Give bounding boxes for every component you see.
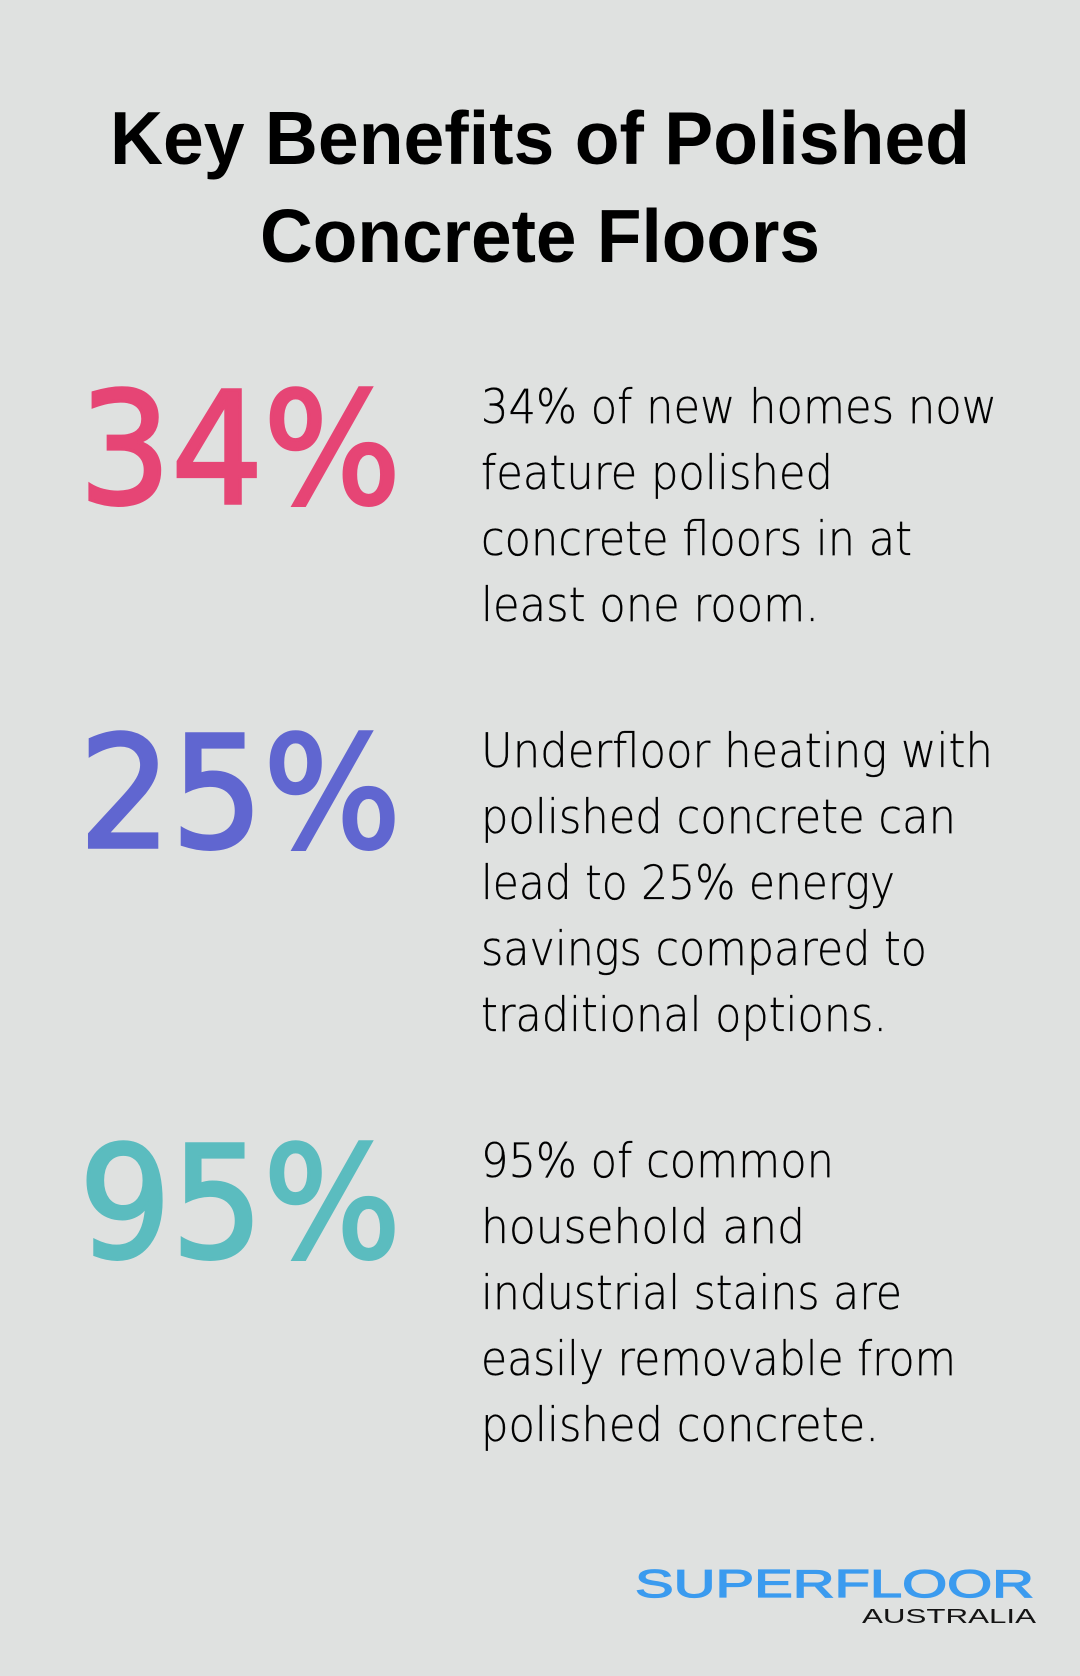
stat description: stain removal: 95% of common [481,1134,834,1189]
stat description: energy savings: polished concrete can [481,790,956,845]
stat description: new homes [481,380,997,633]
logo: Superfloor Australia: AUSTRALIA [862,1606,1037,1628]
stat description: new homes: 34% of new homes now [481,380,997,435]
stat description: stain removal: household and [481,1200,805,1255]
panel: stat 95% [79,1113,956,1453]
title: Concrete Floors [260,194,820,278]
stat description: new homes: least one room. [481,578,819,633]
stat description: stain removal: easily removable from [481,1332,956,1387]
title: Key Benefits of Polished [110,96,970,180]
stat number: 34%: 34% [79,359,401,540]
stat description: stain removal: polished concrete. [481,1398,879,1453]
logo: Superfloor Australia: SUPERFLOOR [635,1563,1034,1606]
stat description: new homes: concrete floors in at [481,512,912,567]
stat description: new homes: feature polished [481,446,833,501]
panel: stat 34% [79,359,997,633]
stat description: stain removal [481,1134,956,1453]
logo: Superfloor Australia [635,1563,1037,1628]
title [110,96,970,278]
stat description: stain removal: industrial stains are [481,1266,902,1321]
stat description: energy savings: traditional options. [481,988,887,1043]
panel: stat 25% [79,703,993,1043]
stat description: energy savings [481,724,993,1043]
stat description: energy savings: savings compared to [481,922,927,977]
stat number: 25%: 25% [79,703,401,884]
stat number: 95%: 95% [79,1113,401,1294]
stat description: energy savings: lead to 25% energy [481,856,895,911]
stat description: energy savings: Underfloor heating with [481,724,993,779]
